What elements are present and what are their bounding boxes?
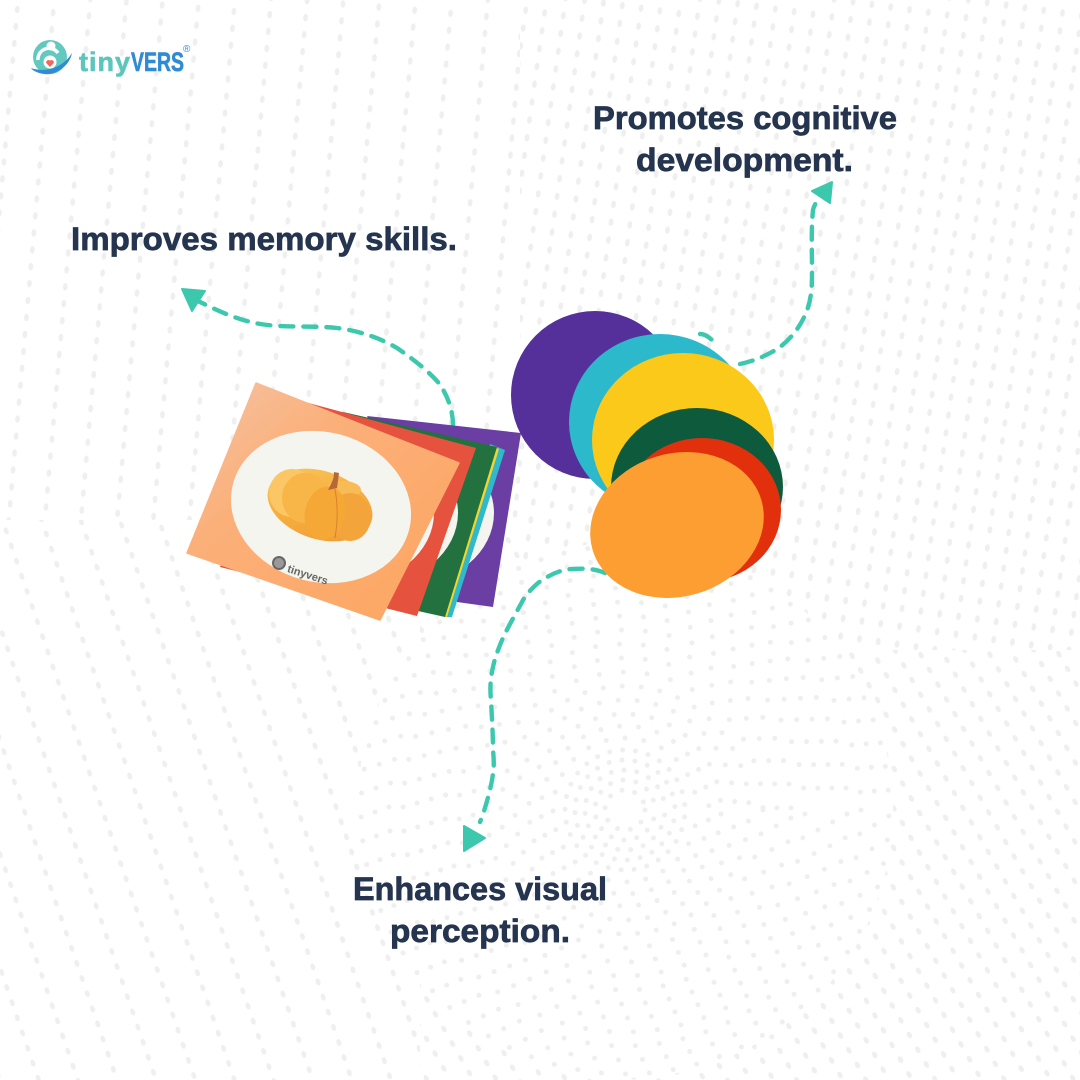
icon: pumpkin bbox=[258, 456, 382, 554]
felt colour circles bbox=[511, 311, 783, 619]
card: purple bbox=[320, 416, 521, 607]
arrow: circles to cognitive development bbox=[700, 182, 832, 364]
logo: tinyvers bbox=[31, 40, 191, 77]
heading: enhances visual perception: perception. bbox=[390, 913, 570, 949]
circle: cyan bbox=[569, 334, 751, 510]
heading: improves memory skills: Improves memory skills. bbox=[71, 221, 457, 257]
card: orange front with pumpkin bbox=[187, 383, 459, 620]
card: green bbox=[282, 412, 497, 617]
arrow: cards to memory skills bbox=[182, 289, 453, 425]
circle: orange bbox=[572, 431, 782, 619]
logo: tinyvers: ® bbox=[183, 44, 191, 55]
heading: enhances visual perception bbox=[353, 871, 607, 949]
card logo: tinyvers bbox=[286, 563, 329, 588]
heading: promotes cognitive development: Promotes cognitive bbox=[593, 100, 897, 136]
card logo bbox=[271, 555, 330, 588]
heading: promotes cognitive development bbox=[593, 100, 897, 178]
card: yellow edge bbox=[430, 445, 499, 617]
circle: purple bbox=[511, 311, 679, 479]
arrow: circles to visual perception bbox=[464, 569, 605, 851]
logo: tinyvers: VERS bbox=[131, 47, 184, 77]
circle: yellow bbox=[592, 353, 774, 527]
flash cards stack bbox=[187, 383, 521, 620]
heading: enhances visual perception: Enhances visual bbox=[353, 871, 607, 907]
card: cyan edge bbox=[445, 444, 505, 617]
circle: dark green bbox=[611, 408, 783, 566]
heading: promotes cognitive development: development. bbox=[636, 142, 853, 178]
icon: logo globe with heart bbox=[31, 40, 72, 74]
wordmark: tiny bbox=[79, 47, 130, 77]
circle: red bbox=[623, 438, 781, 582]
card: red bbox=[220, 398, 476, 616]
